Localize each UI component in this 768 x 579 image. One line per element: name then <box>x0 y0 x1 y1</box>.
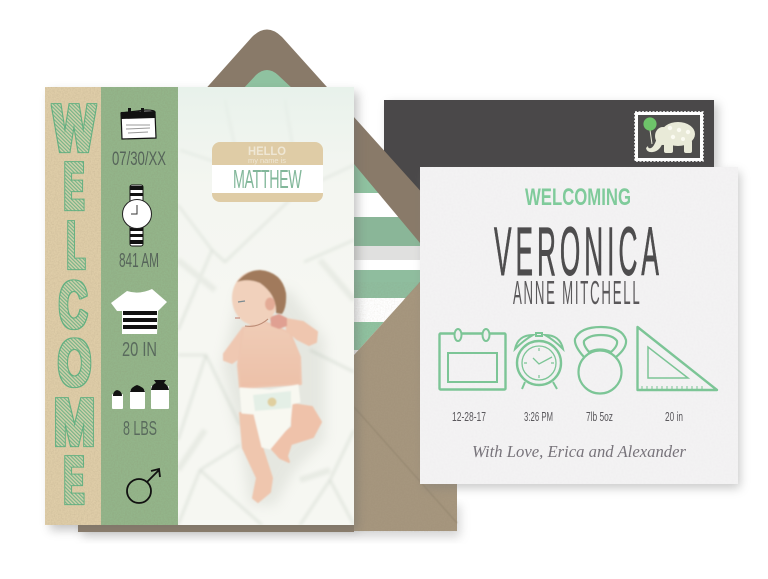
name tag name: MATTHEW <box>233 166 302 194</box>
heading: welcoming: WELCOMING <box>525 184 631 211</box>
label: date: 07/30/XX <box>112 149 166 170</box>
envelope liner stripes <box>354 160 420 356</box>
icon: male symbol <box>127 469 160 503</box>
label: time: 3:26 PM <box>524 409 553 424</box>
label: date: 12-28-17 <box>452 409 486 424</box>
heading: name: VERONICA <box>494 214 663 291</box>
label: length: 20 in <box>665 409 683 424</box>
vertical word WELCOME: W <box>53 92 95 164</box>
hand <box>270 314 287 329</box>
torso <box>238 322 301 388</box>
diaper <box>240 385 300 449</box>
panel: left birth card <box>45 87 354 525</box>
name tag <box>212 142 323 202</box>
envelope body <box>78 282 457 531</box>
label: weight: 7lb 5oz <box>586 409 613 424</box>
vertical word WELCOME <box>53 92 95 516</box>
icon: calendar outline <box>440 329 506 390</box>
icon: watch <box>122 185 152 246</box>
name tag sub-heading: my name is <box>248 158 287 165</box>
signature: With Love, Erica and Alexander <box>472 442 686 461</box>
right leg <box>271 404 321 462</box>
left leg <box>240 413 272 502</box>
vertical word WELCOME: L <box>67 208 85 282</box>
icon: striped shirt <box>111 289 167 334</box>
postage stamp <box>635 112 703 161</box>
baby <box>222 270 325 505</box>
bedding folds <box>178 179 354 524</box>
vertical word WELCOME: E <box>64 444 84 516</box>
head <box>232 271 278 325</box>
vertical word WELCOME: O <box>58 327 91 399</box>
elephant <box>646 122 695 153</box>
photo: baby on white bedding <box>178 87 354 525</box>
left arm <box>222 328 242 364</box>
ear <box>265 298 275 310</box>
label: weight: 8 LBS <box>123 418 157 440</box>
label: length: 20 IN <box>122 339 157 361</box>
envelope flap <box>185 30 460 300</box>
shadow: left card <box>50 92 358 530</box>
envelope <box>78 30 460 537</box>
name tag heading: HELLO <box>248 144 286 158</box>
balloon <box>643 117 657 144</box>
vertical word WELCOME: M <box>54 386 95 458</box>
icon: kettlebell outline <box>575 327 626 394</box>
envelope liner peak <box>242 70 294 90</box>
panel: green strip <box>101 87 178 525</box>
icon: set square ruler outline <box>638 327 717 390</box>
shadow: right card <box>424 172 740 488</box>
vertical word WELCOME: C <box>59 269 87 341</box>
heading: middle and last name: ANNE MITCHELL <box>513 275 641 312</box>
label: time: 841 AM <box>119 250 159 272</box>
hair <box>237 270 286 314</box>
icon: weights <box>112 380 169 409</box>
panel: right announcement card <box>420 167 738 484</box>
icon: alarm clock outline <box>515 333 563 389</box>
vertical word WELCOME: E <box>64 150 84 222</box>
right arm <box>286 319 317 345</box>
dark back card <box>384 100 718 200</box>
panel: kraft strip <box>45 87 101 525</box>
icon: calendar <box>121 108 156 139</box>
